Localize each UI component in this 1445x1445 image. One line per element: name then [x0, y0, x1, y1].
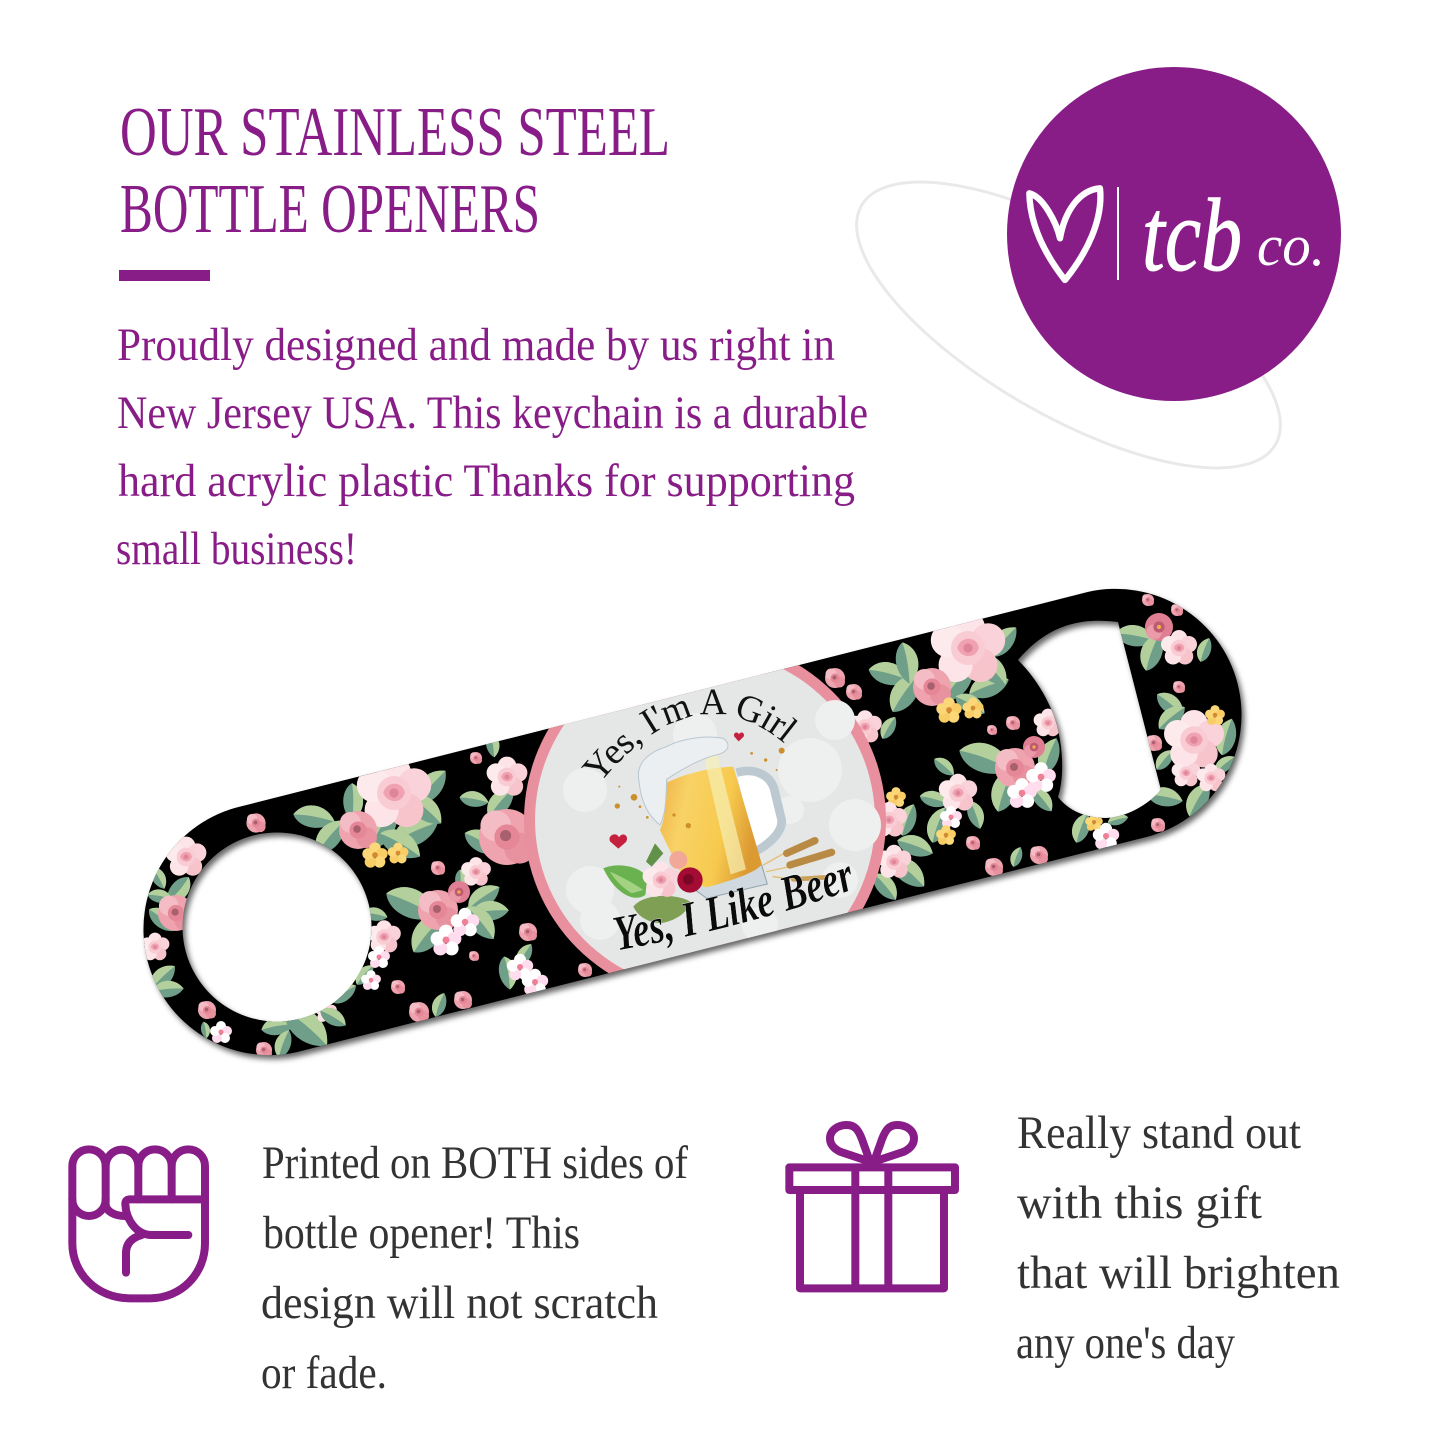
mug handle [737, 771, 782, 852]
title: OUR STAINLESS STEEL [120, 94, 670, 171]
text: really stand out: Really stand out [1017, 1107, 1301, 1159]
logo badge: tcb co. [1007, 67, 1341, 401]
opener black body with holes [143, 589, 1242, 1055]
floral pattern [141, 594, 1240, 1060]
text: really stand out [1016, 1107, 1340, 1369]
intro text block: Proudly designed and made by us right in [117, 319, 835, 371]
text: printed on both sides: or fade. [261, 1347, 387, 1399]
text: really stand out: with this gift [1017, 1177, 1262, 1229]
text: printed on both sides: design will not scratch [261, 1277, 658, 1329]
wheat [763, 841, 832, 879]
logo badge: tcb co.: co. [1257, 213, 1325, 278]
logo badge: tcb co.: tcb [1142, 178, 1242, 293]
bottle opener product [142, 588, 1249, 1064]
icon: gift box [789, 1125, 955, 1288]
label text: Yes, I Like Beer: Yes, I Like Beer [613, 866, 851, 950]
decorative orbit ellipse behind logo [816, 127, 1321, 523]
mug base [682, 865, 767, 898]
text: really stand out: any one's day [1016, 1317, 1235, 1369]
title underline rule [119, 270, 210, 281]
text: really stand out: that will brighten [1017, 1247, 1340, 1299]
intro text block: small business! [116, 523, 357, 575]
title: BOTTLE OPENERS [120, 171, 540, 248]
icon: raised fist [72, 1149, 205, 1298]
foam [638, 737, 728, 825]
center round label [524, 665, 886, 974]
mug beer [660, 767, 762, 887]
icon: hearts [610, 733, 744, 849]
label text: Yes, I'm A Girl: Yes, I'm A Girl [581, 690, 798, 778]
beer mug and flower artwork [603, 733, 832, 923]
intro text block: hard acrylic plastic Thanks for supporting [118, 455, 855, 507]
flower cluster [603, 843, 703, 923]
mug light stripe [703, 751, 746, 874]
title [120, 94, 670, 248]
splatter [615, 748, 785, 828]
text: printed on both sides: Printed on BOTH sides of [262, 1137, 688, 1189]
text: printed on both sides: bottle opener! This [263, 1207, 580, 1259]
intro text block: New Jersey USA. This keychain is a durable [117, 387, 868, 439]
icon: heart [1029, 188, 1100, 280]
intro text block [116, 319, 868, 575]
text: printed on both sides [261, 1137, 688, 1399]
